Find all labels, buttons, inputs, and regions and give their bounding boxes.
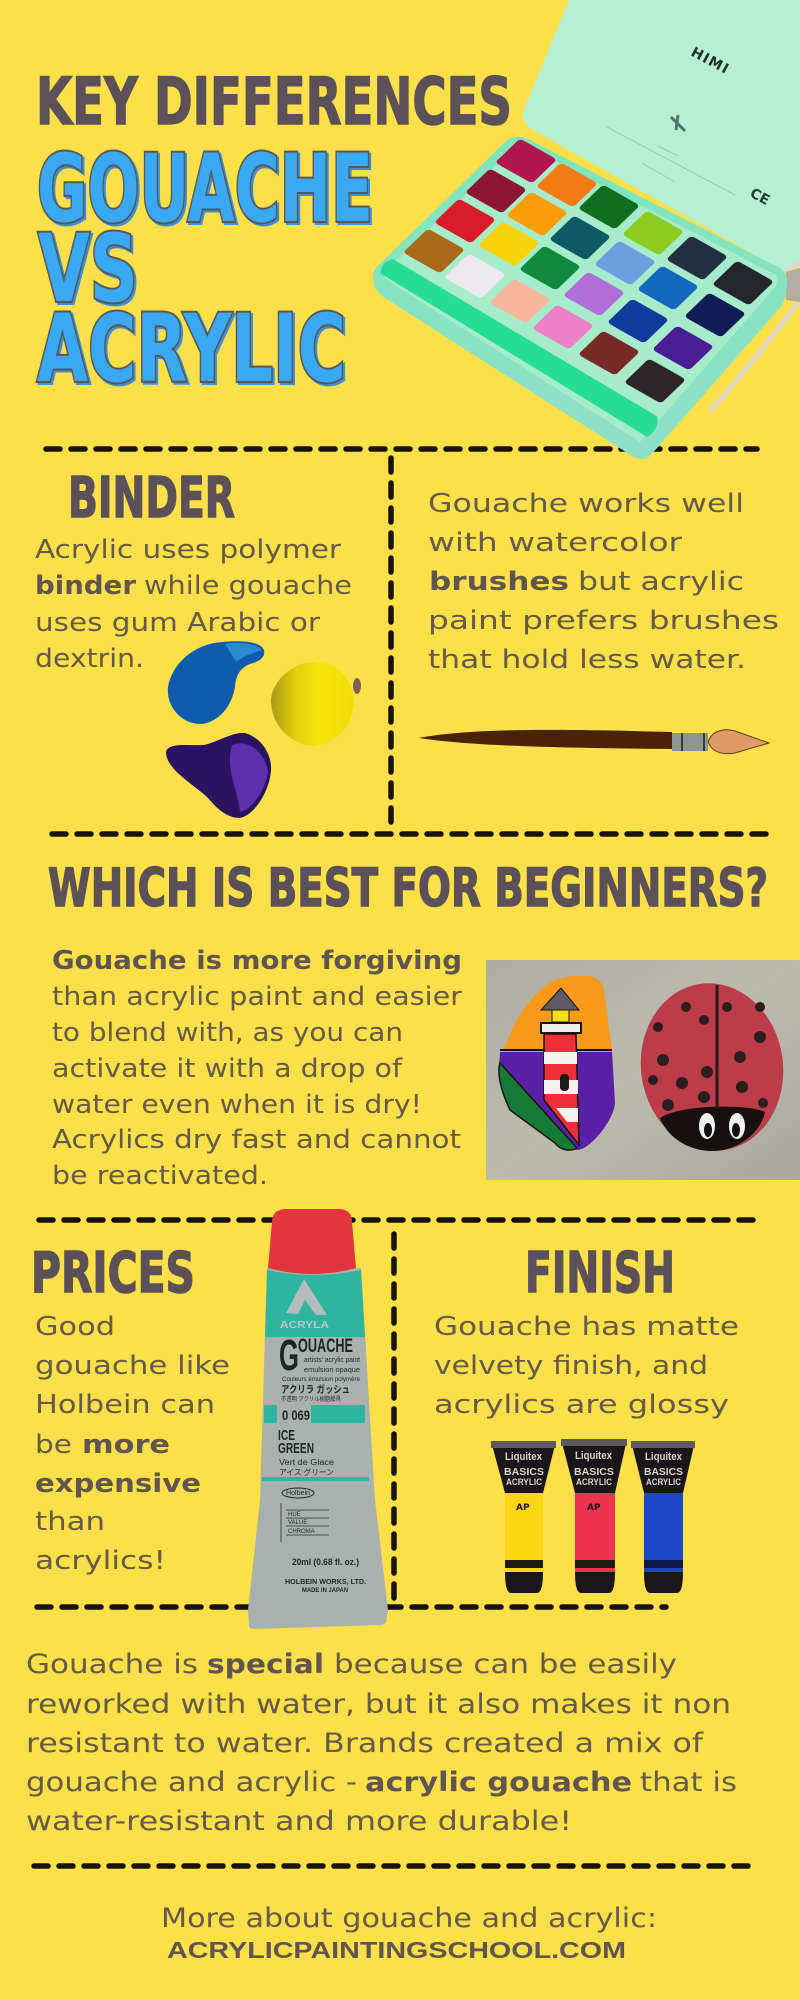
text: beginners: Acrylics dry fast and cannot — [52, 1125, 461, 1155]
title: gouache vs acrylic: VS — [38, 215, 138, 324]
text: gouache is special: acrylic gouache — [365, 1767, 632, 1798]
heading: finish: FINISH — [525, 1241, 675, 1306]
text: gouache is special: because can be easily — [334, 1649, 677, 1680]
palette lid: CE — [747, 185, 772, 209]
binder text: binder — [35, 571, 136, 601]
image: yellow acrylic tube: ACRYLIC — [506, 1477, 542, 1487]
icon: blue paint blob — [168, 641, 264, 724]
text: gouache is special: Gouache is — [26, 1649, 198, 1680]
image: blue acrylic tube: ACRYLIC — [646, 1477, 681, 1487]
binder text: dextrin. — [35, 644, 144, 674]
palette mixing well — [383, 262, 655, 434]
image: painted rocks — [486, 960, 800, 1180]
panel: finish — [434, 1241, 739, 1593]
text: beginners: activate it with a drop of — [52, 1054, 403, 1084]
binder text: uses gum Arabic or — [35, 608, 320, 638]
heading: prices: PRICES — [31, 1241, 195, 1306]
image: red acrylic tube: Liquitex — [575, 1450, 613, 1462]
finish text — [434, 1312, 739, 1420]
text: beginners: water even when it is dry! — [52, 1090, 422, 1120]
binder text: while gouache — [144, 571, 352, 601]
palette lid: HIMI — [688, 44, 731, 77]
image: gouache tube — [248, 1209, 388, 1629]
prices text: Holbein can — [35, 1390, 215, 1420]
binder text — [35, 535, 352, 674]
prices text: gouache like — [35, 1351, 230, 1381]
prices text: Good — [35, 1312, 115, 1342]
brushes text: with watercolor — [428, 528, 682, 558]
panel: binder — [35, 466, 361, 818]
image: blue acrylic tube: BASICS — [644, 1467, 683, 1478]
tube body — [248, 1268, 388, 1629]
finish text: acrylics are glossy — [434, 1390, 729, 1420]
tube teal label — [265, 1270, 365, 1337]
image: blue acrylic tube — [631, 1441, 695, 1593]
tube label text: MADE IN JAPAN — [302, 1588, 348, 1594]
tube label text: 0 069 — [282, 1407, 310, 1423]
tube label text: ICE — [278, 1427, 295, 1444]
title: key differences: KEY DIFFERENCES — [36, 65, 512, 140]
icon: yellow paint blob — [271, 662, 361, 746]
text: gouache is special: water-resistant and more durable! — [26, 1806, 572, 1837]
lighthouse rock — [499, 976, 615, 1151]
image: yellow acrylic tube — [491, 1441, 556, 1593]
footer — [161, 1903, 657, 1963]
text: gouache is special: reworked with water, but it also makes it non — [26, 1689, 731, 1720]
tube label text: GREEN — [278, 1440, 314, 1457]
palette tray — [373, 137, 787, 459]
text: beginners: to blend with, as you can — [52, 1018, 403, 1048]
image: red acrylic tube: BASICS — [574, 1467, 614, 1478]
text: beginners: than acrylic paint and easier — [52, 982, 462, 1012]
tube label text: HOLBEIN WORKS, LTD. — [285, 1579, 366, 1586]
divider: top — [46, 446, 757, 452]
tube label text: 不透明 アクリル樹脂絵具 — [281, 1395, 341, 1403]
prices text: be — [35, 1430, 72, 1460]
image: gouache paint palette — [373, 0, 800, 459]
text: gouache is special: resistant to water. Brands created a mix of — [26, 1728, 705, 1759]
image: yellow acrylic tube: Liquitex — [505, 1451, 543, 1463]
text: gouache is special: special — [207, 1649, 324, 1680]
ladybug rock — [630, 974, 794, 1160]
image: red acrylic tube: AP — [587, 1503, 601, 1513]
tube label text: HUE — [288, 1512, 301, 1518]
brushes text: brushes — [429, 567, 569, 597]
tube label text: アクリラ ガッシュ — [281, 1383, 350, 1396]
image: red acrylic tube — [561, 1439, 627, 1593]
text: beginners: Gouache is more forgiving — [52, 946, 462, 976]
brushes text: that hold less water. — [428, 645, 746, 675]
divider: above footer — [34, 1863, 752, 1869]
tube label text: アイス グリーン — [279, 1467, 334, 1477]
tube logo — [280, 1279, 329, 1331]
title: gouache vs acrylic: ACRYLIC — [37, 295, 346, 404]
finish text: Gouache has matte — [434, 1312, 739, 1342]
prices text: more — [82, 1430, 170, 1460]
panel: brushes — [419, 489, 779, 754]
binder text: Acrylic uses polymer — [35, 535, 341, 565]
tube label text: artists' acrylic paint — [304, 1357, 360, 1364]
palette knife and shadow — [710, 262, 800, 412]
brushes text — [428, 489, 779, 675]
text: gouache is special — [26, 1649, 737, 1837]
tube label text: G — [279, 1331, 299, 1380]
brushes text: Gouache works well — [428, 489, 744, 519]
tube label text: Couleurs émulsion polymère — [282, 1377, 361, 1383]
icon: paint brush — [419, 730, 769, 754]
prices text: acrylics! — [35, 1546, 166, 1576]
tube cap — [268, 1209, 356, 1274]
image: yellow acrylic tube: AP — [516, 1503, 530, 1513]
tube label text: emulsion opaque — [304, 1367, 360, 1374]
icon: purple paint blob — [166, 733, 271, 818]
prices text: than — [35, 1507, 105, 1537]
prices text: expensive — [35, 1469, 201, 1499]
tube label text: 20ml (0.68 fl. oz.) — [292, 1557, 359, 1567]
text: gouache is special: gouache and acrylic - — [26, 1767, 357, 1798]
text: gouache is special: that is — [640, 1767, 737, 1798]
finish text: velvety finish, and — [434, 1351, 708, 1381]
tube label text — [262, 1331, 369, 1594]
divider: above prices — [39, 1217, 757, 1223]
divider: below binder — [52, 831, 770, 837]
text: beginners: be reactivated. — [52, 1161, 268, 1191]
tube label text: CHROMA — [288, 1529, 315, 1535]
image: yellow acrylic tube: BASICS — [504, 1467, 544, 1478]
tube label text: Vert de Glace — [279, 1458, 335, 1467]
heading: binder: BINDER — [68, 466, 235, 531]
footer: More about gouache and acrylic: — [161, 1903, 657, 1934]
title: gouache vs acrylic: GOUACHE — [37, 135, 373, 244]
title: gouache vs acrylic — [37, 135, 373, 404]
tube label text: Holbein — [286, 1490, 310, 1497]
tube logo: ACRYLA — [280, 1320, 329, 1331]
divider: below prices — [37, 1604, 666, 1610]
tube label text: OUACHE — [298, 1336, 353, 1357]
divider: prices vertical — [391, 1234, 397, 1598]
image: red acrylic tube: ACRYLIC — [576, 1477, 612, 1487]
footer: ACRYLICPAINTINGSCHOOL.COM — [167, 1937, 626, 1963]
image: blue acrylic tube: Liquitex — [645, 1451, 683, 1463]
text: beginners — [52, 946, 462, 1191]
brushes text: paint prefers brushes — [428, 606, 779, 636]
paint swatches — [403, 138, 774, 404]
tube label text: VALUE — [288, 1520, 307, 1526]
prices text — [35, 1312, 230, 1576]
palette lid — [523, 0, 800, 271]
divider: binder vertical — [388, 458, 394, 823]
panel: prices — [31, 1241, 230, 1576]
brushes text: but acrylic — [578, 567, 744, 597]
